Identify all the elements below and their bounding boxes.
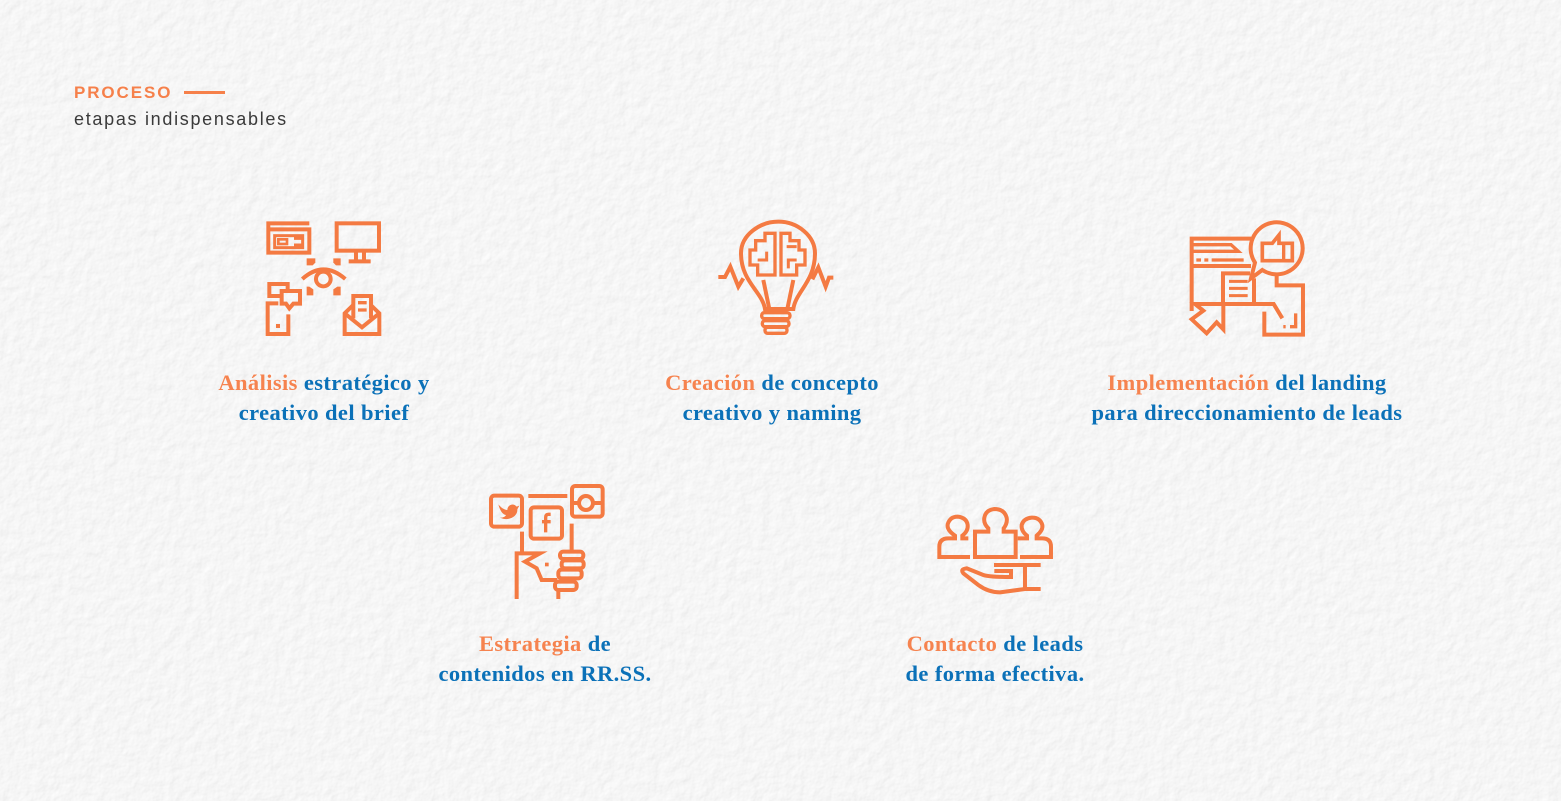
icon: hand holding people: [939, 509, 1051, 592]
caption: contacto: Contacto de leads: [907, 631, 1083, 656]
icon: landing page with like bubble: [1192, 222, 1303, 335]
caption: analisis: Análisis estratégico y: [218, 370, 430, 395]
caption: implementacion: Implementación del landing: [1107, 370, 1387, 395]
icon: analysis screens and eye: [268, 223, 379, 334]
caption: contacto: de forma efectiva.: [906, 661, 1084, 686]
caption: creacion: creativo y naming: [683, 400, 862, 425]
heading: proceso: PROCESO: [74, 83, 172, 102]
caption: estrategia: Estrategia de: [479, 631, 611, 656]
caption: creacion: Creación de concepto: [665, 370, 879, 395]
icon: hand holding social media signs: [491, 486, 603, 599]
icon: light bulb with brain: [718, 222, 833, 333]
caption: estrategia: contenidos en RR.SS.: [438, 661, 652, 686]
caption: analisis: creativo del brief: [239, 400, 409, 425]
heading: proceso: etapas indispensables: [74, 109, 288, 129]
caption: implementacion: para direccionamiento de leads: [1092, 400, 1402, 425]
heading: proceso: [74, 83, 288, 129]
